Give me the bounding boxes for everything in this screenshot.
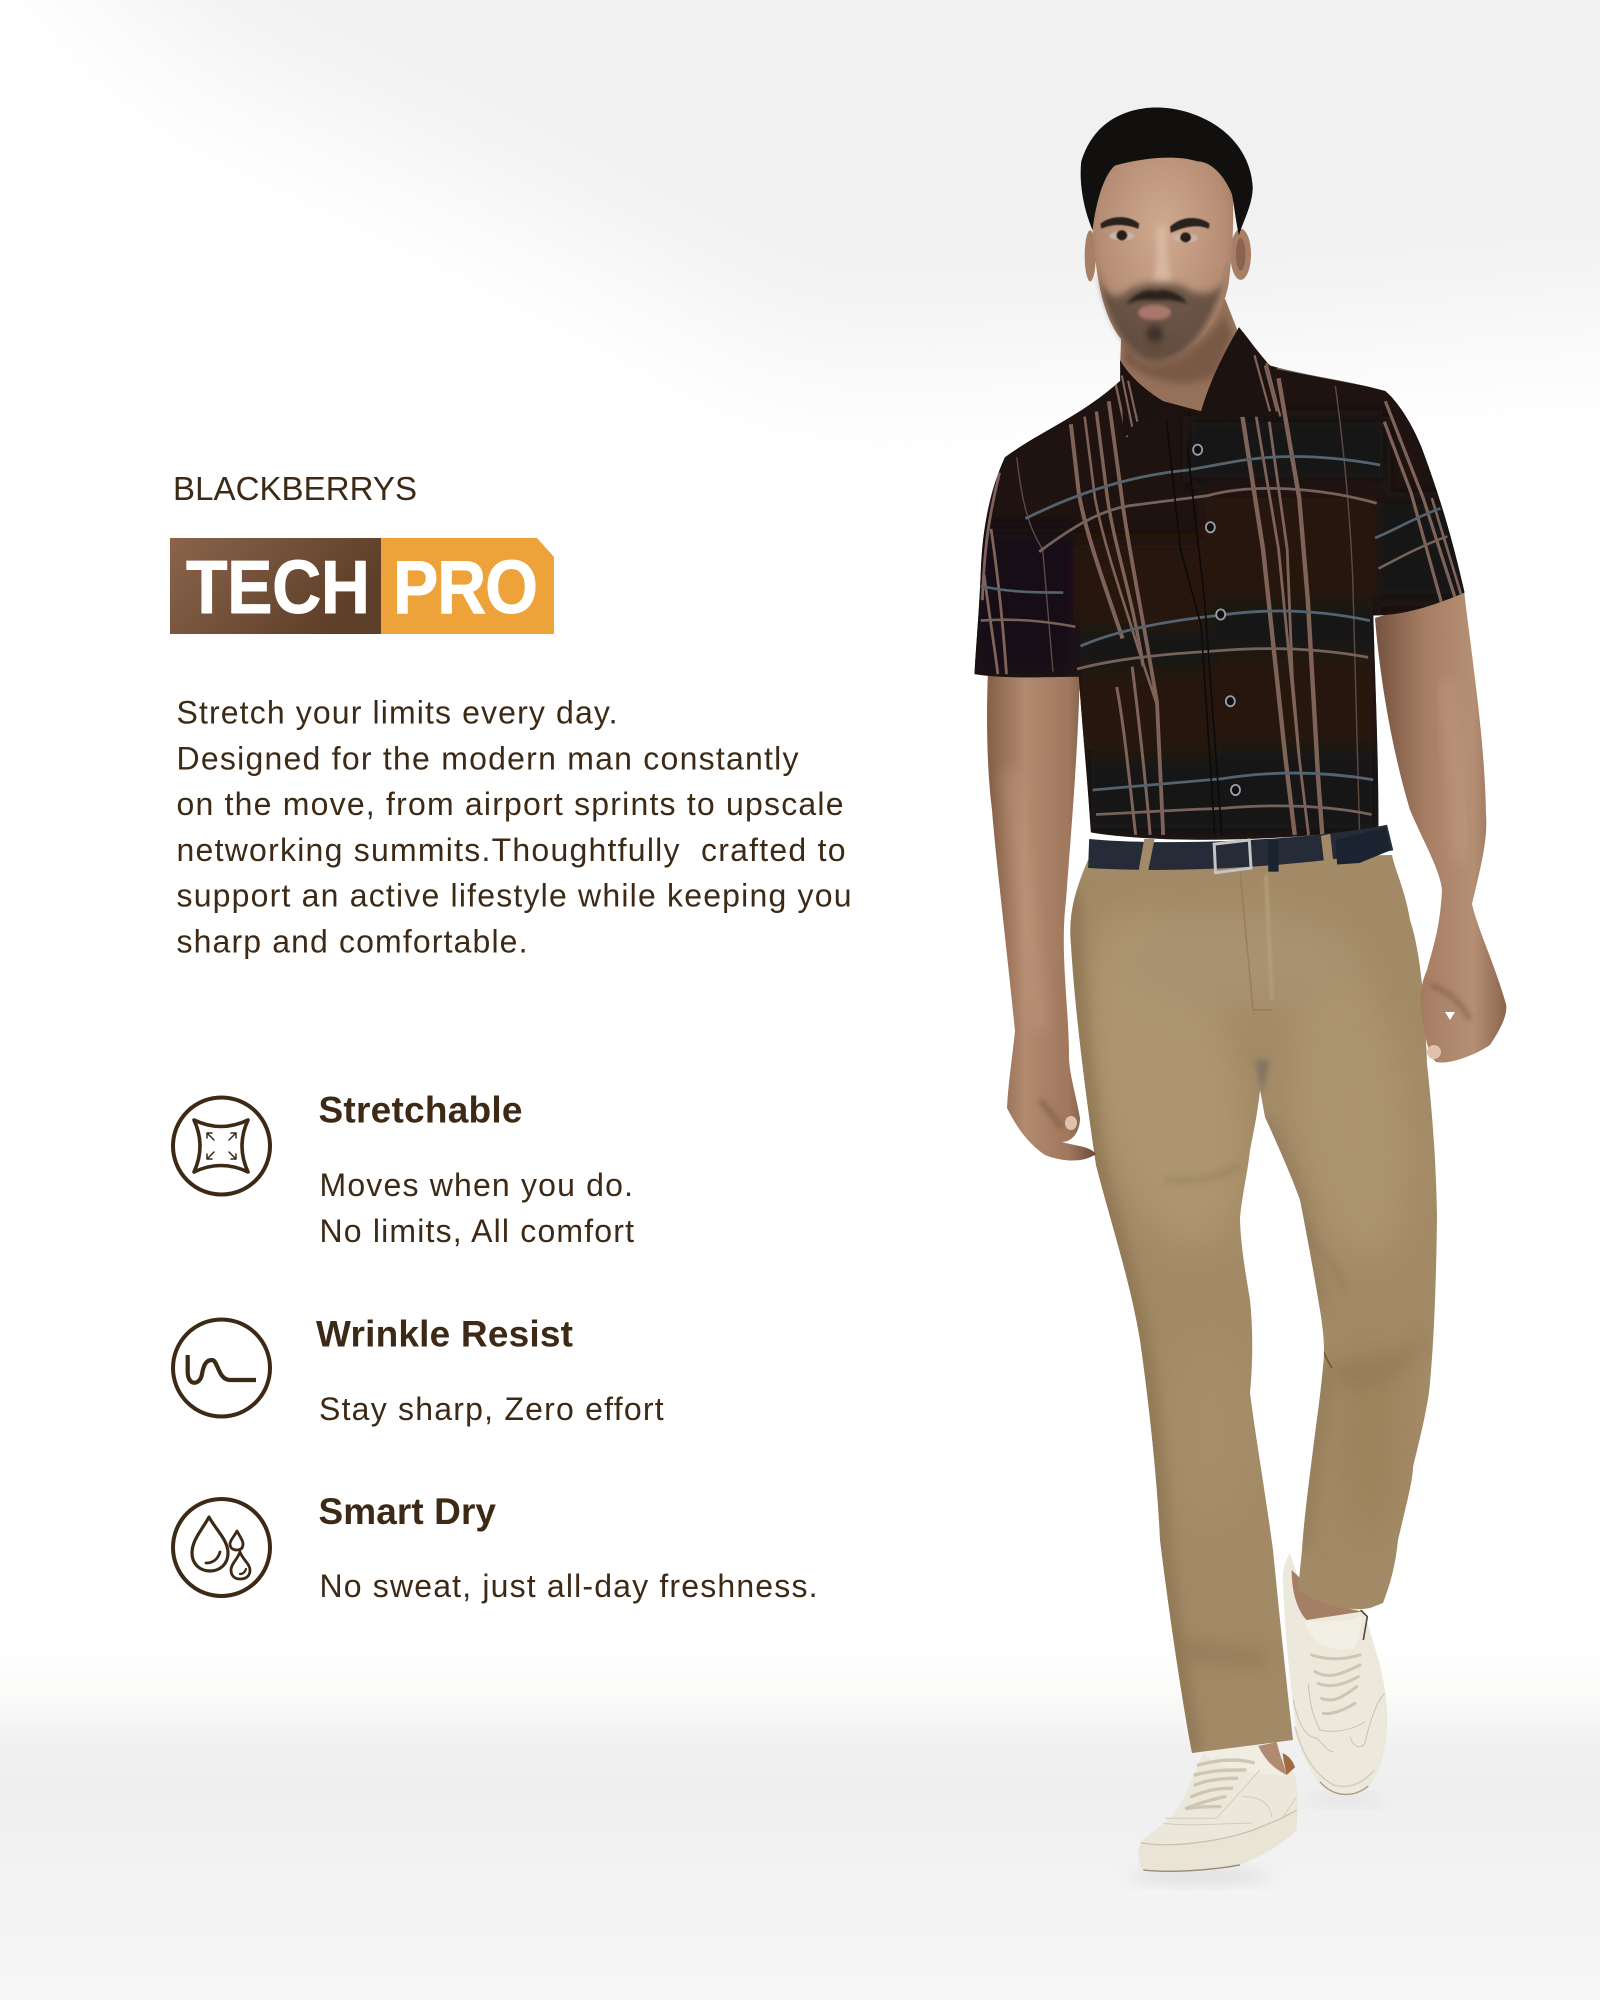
feature text: stretchable: Moves when you do. bbox=[320, 1167, 633, 1203]
nose highlight bbox=[1153, 225, 1172, 286]
feature heading: stretchable: Stretchable bbox=[318, 1090, 522, 1131]
face bbox=[1093, 145, 1233, 359]
collar bbox=[1120, 327, 1279, 438]
front shoe bbox=[1138, 1742, 1298, 1871]
beard bbox=[1095, 263, 1229, 361]
neck bbox=[1120, 299, 1237, 417]
logo: tech pro: TECH bbox=[186, 546, 370, 630]
feature heading: smart dry: Smart Dry bbox=[318, 1491, 496, 1532]
right arm and hand bbox=[1375, 590, 1506, 1063]
belt tip bbox=[1335, 827, 1390, 864]
feature text: stretchable bbox=[320, 1167, 634, 1249]
shirt tonal bands bbox=[974, 417, 1466, 835]
back shoe bbox=[1283, 1553, 1387, 1797]
keeper bbox=[1268, 840, 1279, 872]
figure: model bbox=[974, 108, 1506, 1883]
intro paragraph: networking summits.Thoughtfully crafted to bbox=[176, 832, 846, 868]
intro paragraph: Stretch your limits every day. bbox=[176, 694, 618, 730]
shirt stripes: horizontal bbox=[981, 457, 1447, 814]
belt loops bbox=[1138, 834, 1334, 873]
feature text: smart dry: No sweat, just all-day freshness. bbox=[320, 1568, 818, 1604]
logo: tech pro bbox=[170, 538, 554, 634]
belt bbox=[1088, 825, 1393, 873]
eyebrows bbox=[1101, 217, 1210, 233]
goatee bbox=[1146, 326, 1163, 342]
icon: wrinkle resist bbox=[173, 1320, 270, 1416]
moustache bbox=[1126, 290, 1187, 304]
intro paragraph: Designed for the modern man constantly bbox=[176, 740, 798, 776]
lips bbox=[1138, 305, 1171, 320]
intro paragraph: on the move, from airport sprints to upscale bbox=[176, 786, 844, 822]
neck shadow bbox=[1124, 314, 1232, 383]
floor shadows bbox=[1130, 1795, 1385, 1883]
eyes bbox=[1109, 230, 1198, 243]
head bbox=[1081, 108, 1253, 417]
trousers bbox=[1061, 855, 1437, 1753]
feature text: wrinkle resist: Stay sharp, Zero effort bbox=[319, 1391, 664, 1427]
brand name: BLACKBERRYS bbox=[173, 470, 417, 507]
feature heading: wrinkle resist: Wrinkle Resist bbox=[316, 1314, 573, 1355]
shirt stripes: thin seams bbox=[1017, 386, 1360, 830]
ears bbox=[1085, 229, 1251, 281]
feature text: stretchable: No limits, All comfort bbox=[320, 1213, 634, 1249]
shirt stripes: vertical bbox=[982, 355, 1463, 835]
placket bbox=[1167, 422, 1222, 835]
icon: smart dry bbox=[173, 1499, 270, 1596]
buckle bbox=[1214, 840, 1251, 873]
logo: tech pro: PRO bbox=[393, 546, 538, 630]
icon: stretchable bbox=[173, 1098, 270, 1194]
intro paragraph: support an active lifestyle while keeping you bbox=[176, 878, 852, 914]
shirt bbox=[974, 327, 1466, 840]
left arm and hand bbox=[987, 670, 1096, 1161]
collar stripes bbox=[1122, 355, 1277, 427]
intro paragraph: sharp and comfortable. bbox=[176, 924, 528, 960]
buttons bbox=[1193, 445, 1240, 795]
hair bbox=[1081, 108, 1253, 235]
intro paragraph bbox=[176, 694, 852, 960]
